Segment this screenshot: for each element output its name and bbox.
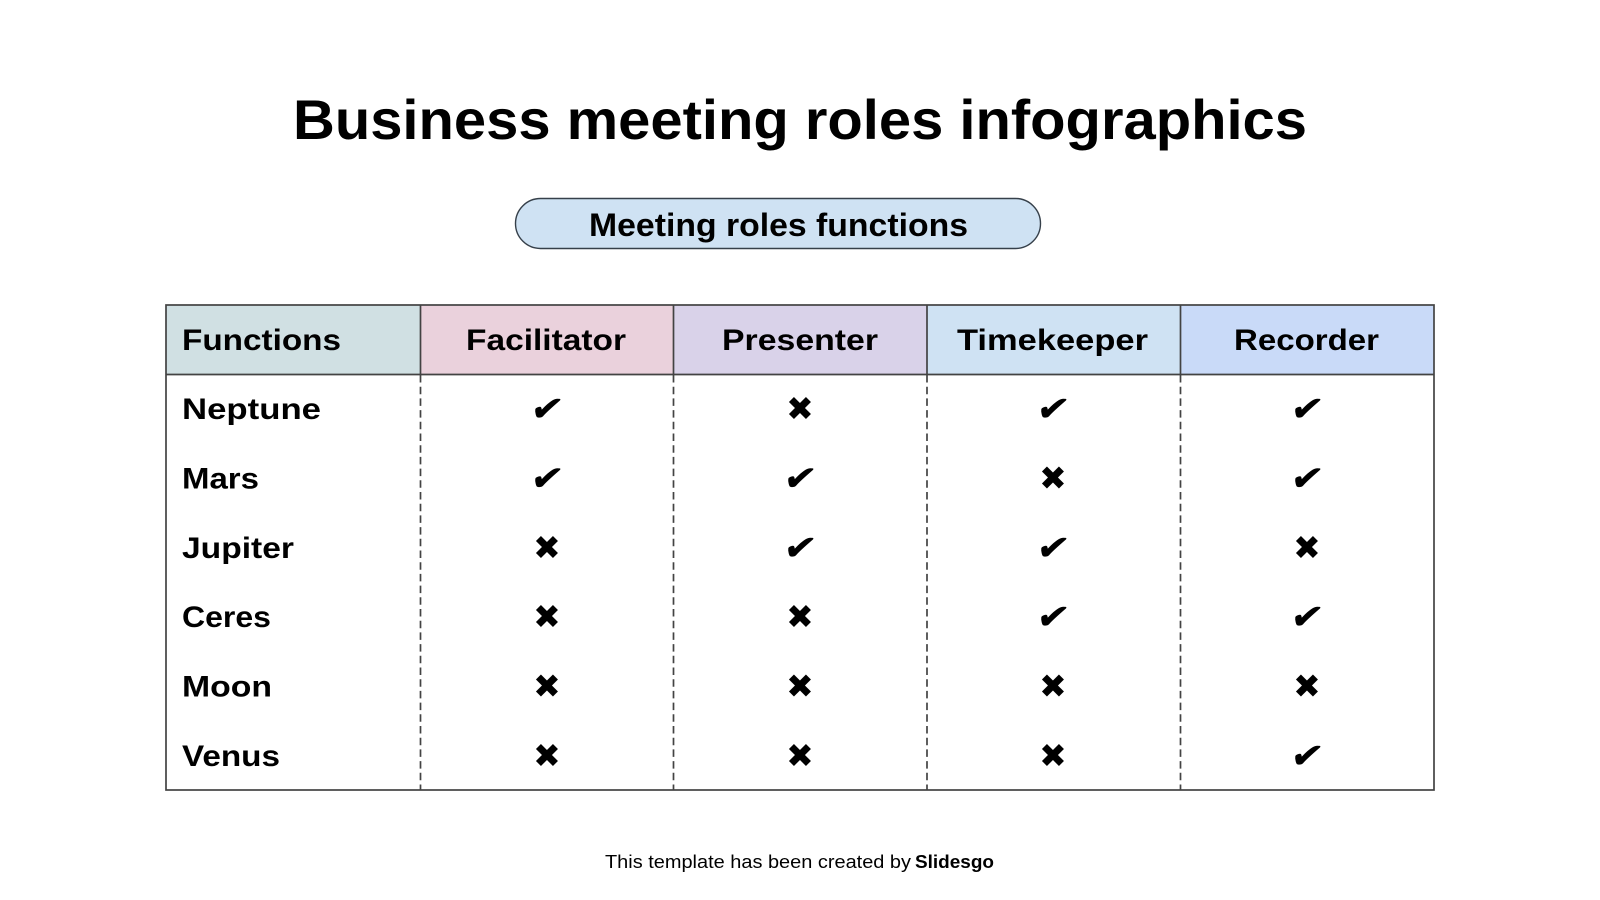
row: Moon: ✖ (1293, 667, 1321, 706)
title: Business meeting roles infographics (293, 88, 1307, 151)
row: Jupiter: ✔ (1034, 529, 1072, 567)
table grid lines (166, 305, 1434, 790)
subtitle pill: Meeting roles functions (589, 207, 968, 243)
subtitle pill (516, 198, 1040, 248)
row: Jupiter: ✔ (781, 529, 819, 567)
row: Venus (182, 736, 1326, 775)
header cell: Functions (166, 305, 420, 374)
header cell: Presenter (674, 305, 927, 374)
row: Mars: ✔ (1288, 459, 1326, 498)
row: Ceres (182, 597, 1326, 637)
row: Moon: ✖ (1039, 667, 1067, 706)
row: Venus: ✖ (533, 736, 561, 775)
row: Jupiter: Jupiter (182, 532, 294, 565)
footer credit: Slidesgo (915, 852, 994, 872)
row: Moon (182, 667, 1321, 706)
row: Neptune: ✔ (1288, 390, 1326, 428)
row: Neptune: ✔ (528, 390, 566, 428)
row: Jupiter (182, 528, 1321, 567)
row: Mars: ✔ (781, 459, 819, 498)
row: Mars: Mars (182, 462, 259, 495)
row: Moon: Moon (182, 671, 272, 704)
row: Neptune: Neptune (182, 393, 321, 426)
row: Venus: Venus (182, 740, 280, 773)
row: Neptune: ✖ (786, 389, 814, 428)
row: Ceres: ✔ (1034, 598, 1072, 637)
row: Ceres: Ceres (182, 601, 271, 634)
header cell: Presenter: Presenter (722, 324, 878, 357)
row: Venus: ✔ (1288, 737, 1326, 775)
row: Jupiter: ✖ (533, 528, 561, 567)
row: Moon: ✖ (786, 667, 814, 706)
table: meeting roles functions (166, 305, 1434, 790)
row: Jupiter: ✖ (1293, 528, 1321, 567)
row: Mars: ✖ (1039, 458, 1067, 497)
row: Ceres: ✖ (786, 597, 814, 636)
row: Venus: ✖ (1039, 736, 1067, 775)
header cell: Timekeeper: Timekeeper (957, 324, 1148, 357)
row: Neptune (182, 389, 1326, 428)
row: Ceres: ✖ (533, 597, 561, 636)
row: Neptune: ✔ (1034, 390, 1072, 428)
row: Mars: ✔ (528, 459, 566, 498)
footer credit: This template has been created by (605, 852, 911, 872)
row: Venus: ✖ (786, 736, 814, 775)
header cell: Timekeeper (927, 305, 1180, 374)
row: Ceres: ✔ (1288, 598, 1326, 637)
header cell: Facilitator (420, 305, 674, 374)
header cell: Recorder: Recorder (1234, 324, 1379, 357)
row: Mars (182, 458, 1326, 498)
header cell: Facilitator: Facilitator (466, 324, 626, 357)
row: Moon: ✖ (533, 667, 561, 706)
header cell: Recorder (1180, 305, 1434, 374)
header cell: Functions: Functions (182, 324, 341, 357)
